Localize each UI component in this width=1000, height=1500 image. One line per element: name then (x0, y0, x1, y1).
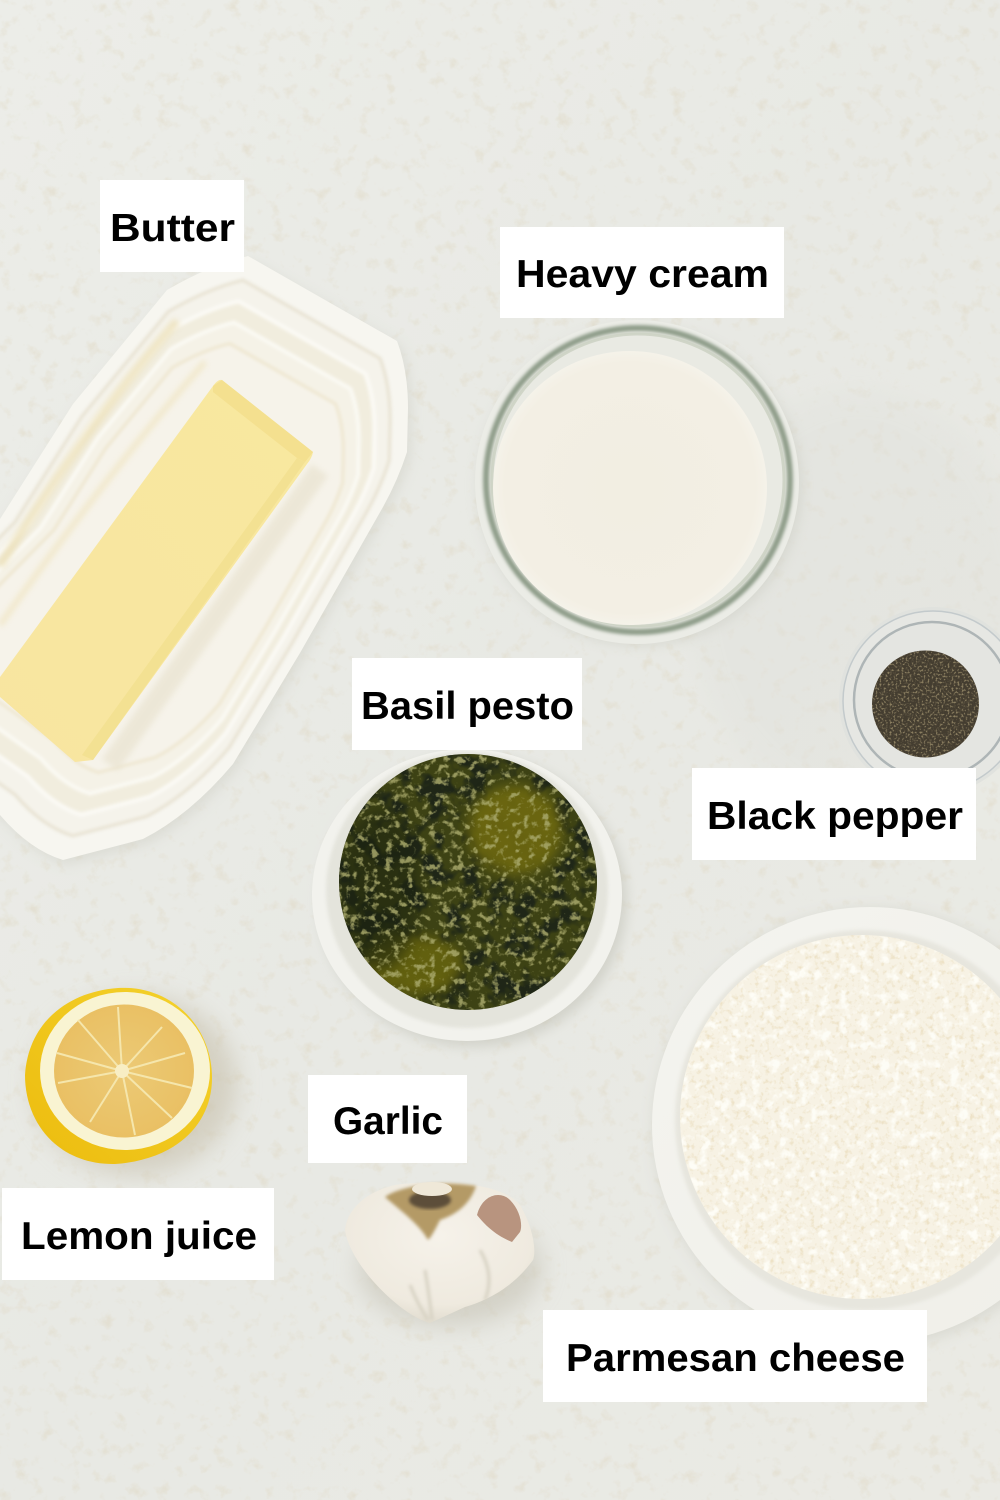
label: Basil pesto: Basil pesto (361, 685, 574, 728)
bowl of basil pesto (312, 749, 627, 1047)
pesto mottling (335, 750, 603, 1014)
lemon segment lines (57, 1007, 192, 1135)
butter stick (0, 380, 313, 762)
garlic bulb (345, 1182, 542, 1326)
label: Lemon juice: Lemon juice (21, 1215, 257, 1258)
bowl of black pepper (839, 607, 1000, 795)
jar of heavy cream (475, 320, 802, 646)
bowl of parmesan cheese (652, 907, 1000, 1348)
label: Butter: Butter (110, 207, 235, 250)
butter dish (0, 256, 412, 865)
label: Parmesan cheese: Parmesan cheese (566, 1337, 905, 1380)
grated cheese texture (678, 932, 1000, 1302)
label: Parmesan cheese (543, 1310, 927, 1402)
label: Garlic (308, 1075, 467, 1163)
label: Heavy cream: Heavy cream (516, 253, 769, 296)
lemon half (25, 988, 237, 1175)
label: Garlic: Garlic (333, 1100, 443, 1143)
label: Heavy cream (500, 227, 784, 318)
label: Butter (100, 180, 244, 272)
label: Basil pesto (352, 658, 582, 750)
label: Black pepper (692, 768, 976, 860)
label: Black pepper: Black pepper (707, 795, 963, 838)
label: Lemon juice (2, 1188, 274, 1280)
